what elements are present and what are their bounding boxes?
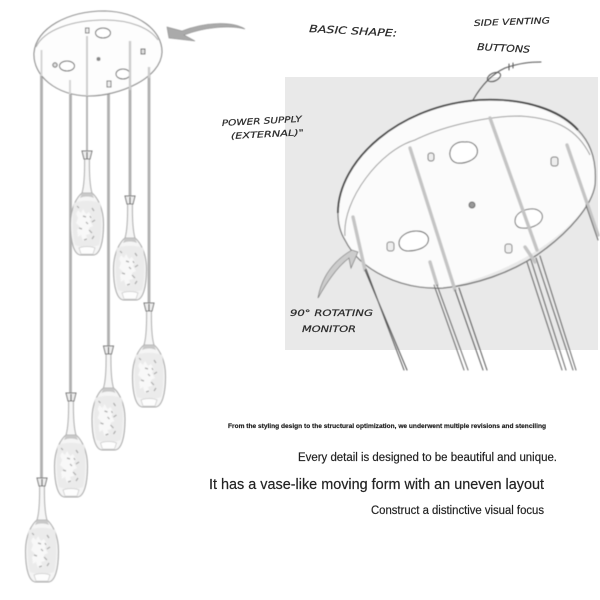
sketch rods — [353, 118, 598, 370]
holes — [450, 142, 477, 163]
pendant 2 — [114, 196, 146, 300]
handwritten label: 90 degree rotating: 90° ROTATING — [290, 309, 374, 319]
handwritten label: external: (EXTERNAL)" — [231, 128, 304, 142]
handwritten label: basic shape: BASIC SHAPE: — [309, 24, 397, 40]
pendant 6 — [26, 478, 58, 582]
pendant 5 — [54, 393, 88, 497]
suspension rods — [42, 30, 149, 478]
gray sketch panel — [285, 77, 598, 350]
pendant 3 — [132, 303, 166, 407]
ceiling plate — [34, 11, 162, 96]
pendant 1 — [70, 151, 104, 255]
handwritten label: buttons: BUTTONS — [477, 42, 530, 56]
caption: vase-like form: It has a vase-like moving form with an uneven layout — [209, 477, 544, 493]
caption: visual focus: Construct a distinctive visual focus — [371, 505, 544, 517]
enlarged plate sketch — [338, 100, 596, 288]
sketch pointer: side venting buttons — [473, 62, 541, 100]
handwritten label: power supply: POWER SUPPLY — [222, 115, 303, 129]
caption: small intro: From the styling design to the structural optimization, we underwent multiple revisions and stenciling — [228, 423, 546, 430]
handwritten label: side venting: SIDE VENTING — [474, 16, 551, 29]
handwritten label: monitor: MONITOR — [302, 325, 356, 335]
caption: every detail: Every detail is designed to be beautiful and unique. — [298, 452, 557, 464]
pendant 4 — [92, 346, 125, 450]
sketch pointer: rotating monitor — [318, 250, 358, 298]
arrow pointing to plate — [167, 24, 245, 41]
